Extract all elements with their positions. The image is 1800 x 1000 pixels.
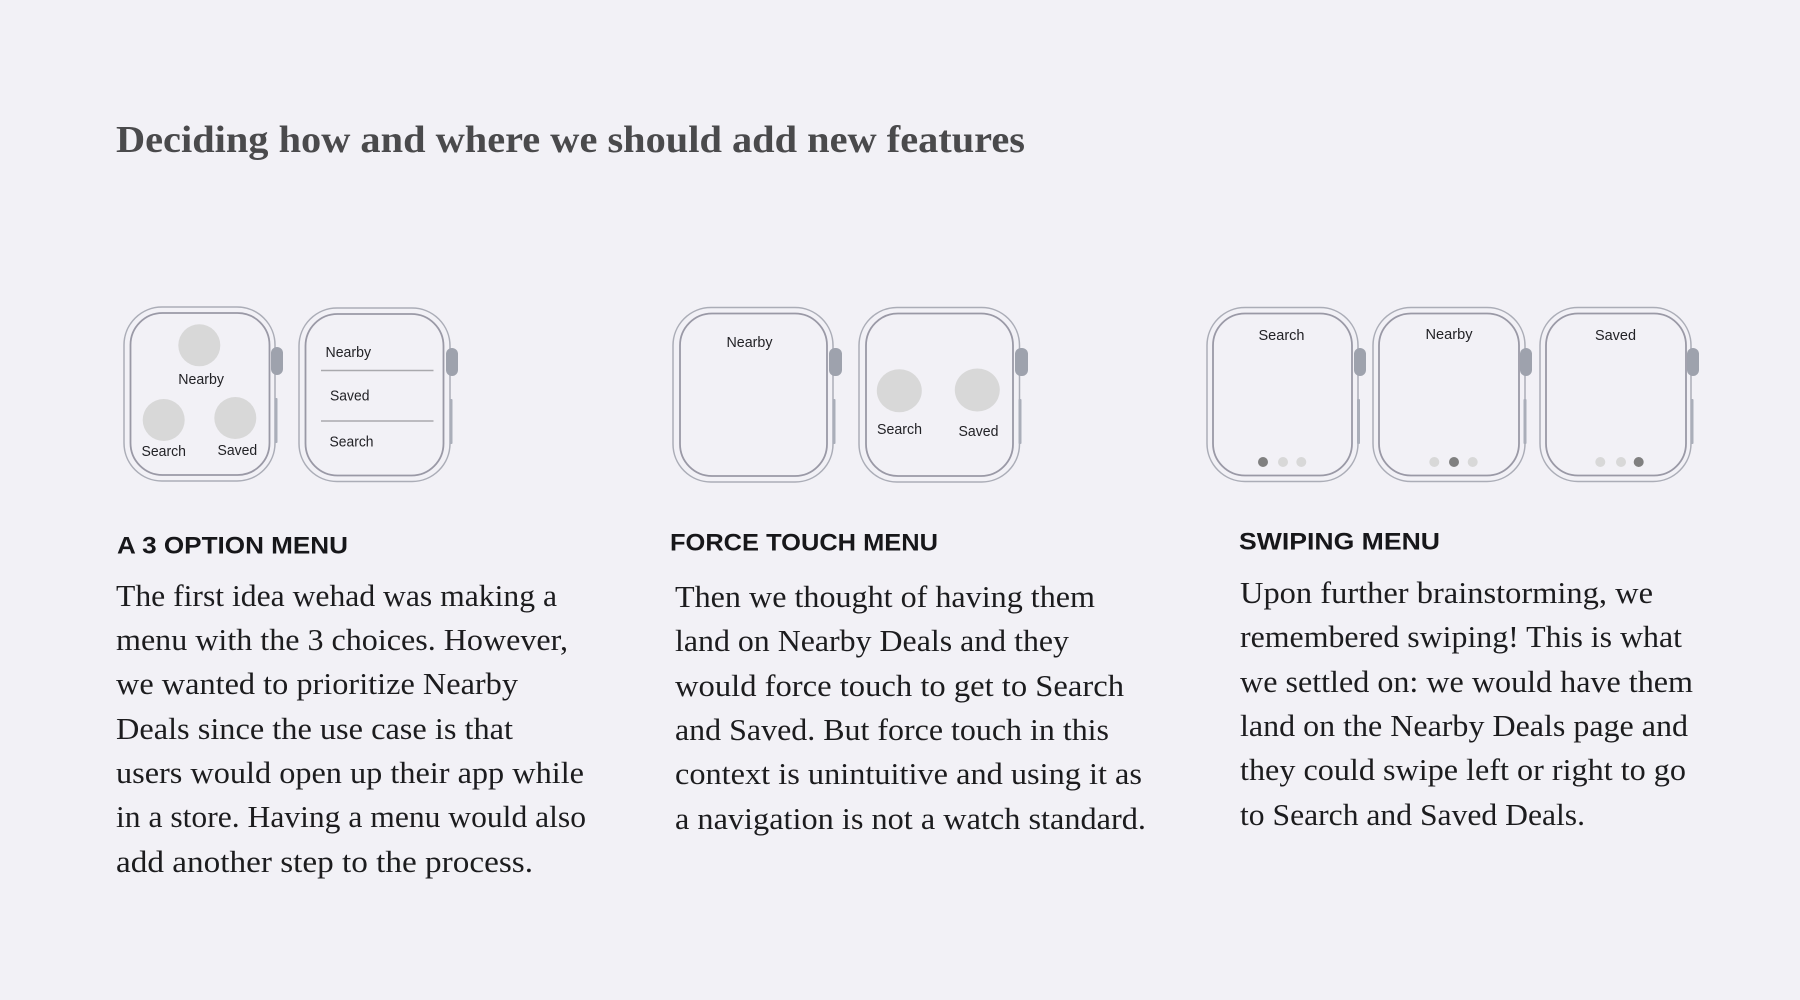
watch: list menu: Saved: [330, 388, 370, 405]
text block: force touch: Then we thought of having them: [675, 579, 1095, 614]
text block: first idea: we wanted to prioritize Nearby: [116, 666, 519, 701]
text block: first idea: users would open up their app while: [116, 755, 584, 790]
text block: swiping: they could swipe left or right to go: [1240, 752, 1686, 787]
text block: swiping: land on the Nearby Deals page and: [1240, 708, 1689, 743]
text block: first idea: menu with the 3 choices. However,: [116, 622, 568, 657]
text block: force touch: a navigation is not a watch standard.: [675, 801, 1146, 836]
watch: three circles menu: [124, 307, 283, 481]
text block: first idea: Deals since the use case is that: [116, 711, 513, 746]
watch: saved page: Saved: [1595, 327, 1636, 344]
panel: force touch menu: [670, 308, 1146, 836]
text block: first idea: in a store. Having a menu would also: [116, 799, 586, 834]
text block: swiping: we settled on: we would have them: [1240, 664, 1693, 699]
text block: force touch: and Saved. But force touch in this: [675, 712, 1109, 747]
panel: 3 option menu: [116, 307, 586, 879]
watch: force touch options: Saved: [958, 423, 998, 440]
watch: three circles menu: Search: [142, 443, 186, 460]
text block: force touch: land on Nearby Deals and they: [675, 623, 1070, 658]
watch: search page: [1207, 308, 1366, 482]
watch: nearby landing: Nearby: [726, 334, 773, 351]
watch: three circles menu: Saved: [218, 442, 257, 459]
watch: list menu: [299, 308, 458, 482]
heading: swiping menu: SWIPING MENU: [1239, 528, 1440, 556]
watch: nearby landing: [673, 308, 842, 482]
text block: first idea: The first idea wehad was making a: [116, 578, 557, 613]
text block: swiping: remembered swiping! This is what: [1240, 619, 1682, 654]
text block: swiping: [1240, 575, 1693, 832]
text block: first idea: add another step to the process.: [116, 844, 533, 879]
watch: nearby page: Nearby: [1426, 326, 1473, 343]
text block: force touch: would force touch to get to Search: [675, 668, 1125, 703]
text block: force touch: context is unintuitive and using it as: [675, 756, 1142, 791]
heading: a 3 option menu: A 3 OPTION MENU: [117, 532, 348, 560]
watch: search page: Search: [1258, 327, 1304, 344]
heading: force touch menu: FORCE TOUCH MENU: [670, 530, 938, 556]
text block: first idea: [116, 578, 586, 879]
watch: three circles menu: Nearby: [178, 371, 224, 388]
watch: saved page: [1540, 308, 1699, 482]
watch: force touch options: Search: [877, 421, 922, 438]
text block: force touch: [675, 579, 1146, 836]
watch: list menu: Nearby: [326, 344, 371, 361]
panel: swiping menu: [1207, 308, 1699, 832]
watch: list menu: Search: [330, 434, 374, 451]
text block: swiping: to Search and Saved Deals.: [1240, 797, 1585, 832]
title: Deciding how and where we should add new features: [116, 119, 1025, 161]
watch: nearby page: [1373, 308, 1532, 482]
watch: force touch options: [859, 308, 1028, 482]
text block: swiping: Upon further brainstorming, we: [1240, 575, 1653, 610]
